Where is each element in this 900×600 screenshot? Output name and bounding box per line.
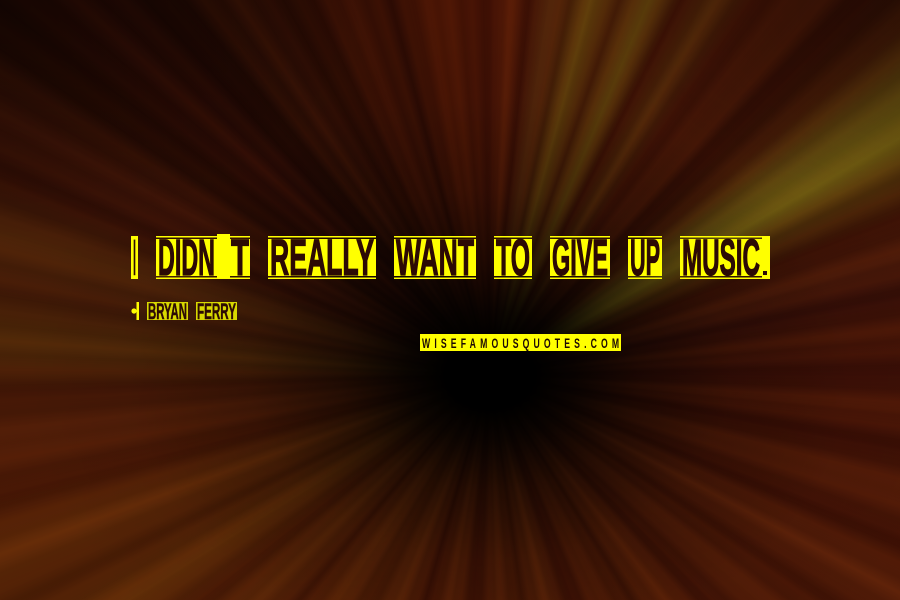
quote text xyxy=(131,229,770,286)
word: MUSIC.: MUSIC xyxy=(682,229,760,286)
word: GIVE xyxy=(550,229,610,286)
quote text: I xyxy=(133,229,136,286)
author: BRYAN: BRYAN xyxy=(148,299,187,324)
word: TO xyxy=(494,229,532,286)
word: WANT: WANT xyxy=(396,229,474,286)
word: TO: TO xyxy=(496,229,530,286)
icon: author bullet xyxy=(131,302,139,320)
word: WANT xyxy=(394,229,476,286)
author credit xyxy=(131,299,237,324)
quote text: GIVE xyxy=(552,229,608,286)
word: DIDN'T: DIDN xyxy=(158,229,215,286)
word: DIDN'T: T xyxy=(231,229,249,286)
word: I xyxy=(131,229,138,286)
word: REALLY: REALLY xyxy=(270,229,374,286)
quote text: UP xyxy=(630,229,660,286)
logo: wisefamousquotes.com: WISEFAMOUSQUOTES.COM xyxy=(422,336,619,352)
author: FERRY: FERRY xyxy=(197,299,236,324)
word: MUSIC. xyxy=(680,229,770,286)
word: REALLY xyxy=(268,229,376,286)
word: UP xyxy=(628,229,662,286)
